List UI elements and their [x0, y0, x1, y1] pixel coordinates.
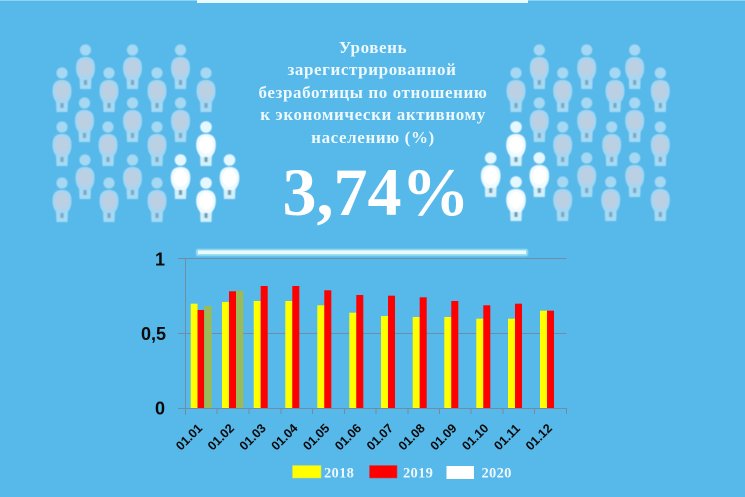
top edge highlight — [0, 0, 745, 1]
series 2018 — [191, 301, 547, 408]
y axis labels: 1 — [155, 250, 165, 270]
y axis labels: 0 — [155, 398, 165, 418]
title: зарегистрированной — [287, 60, 457, 79]
x axis labels: 01.12 — [523, 421, 555, 453]
bar chart — [141, 250, 566, 453]
x axis labels: 01.08 — [396, 421, 428, 453]
x axis labels: 01.09 — [428, 421, 460, 453]
x axis labels: 01.03 — [237, 421, 269, 453]
x axis labels — [173, 421, 555, 453]
x axis labels: 01.04 — [269, 421, 301, 453]
top accent bar — [197, 0, 528, 3]
x axis labels: 01.02 — [205, 421, 237, 453]
x axis labels: 01.11 — [491, 421, 523, 453]
legend — [292, 466, 512, 482]
x axis labels: 01.10 — [459, 421, 491, 453]
y axis labels — [141, 250, 166, 418]
title: населению (%) — [311, 128, 435, 147]
divider bar above chart — [196, 249, 528, 256]
title: к экономически активному — [260, 105, 486, 124]
legend: 2020 — [482, 466, 512, 482]
y axis labels: 0,5 — [141, 324, 166, 344]
series 2019 — [198, 286, 554, 408]
title: безработицы по отношению — [259, 83, 487, 102]
x axis labels: 01.06 — [332, 421, 364, 453]
headline value: 3,74% — [282, 154, 470, 230]
people group: left — [52, 44, 239, 222]
x axis labels: 01.01 — [173, 421, 205, 453]
series 2020 — [204, 291, 243, 408]
title — [259, 38, 487, 147]
title: Уровень — [339, 38, 407, 57]
people group: right — [481, 44, 670, 221]
legend: 2019 — [403, 466, 433, 482]
x axis labels: 01.05 — [300, 421, 332, 453]
x axis labels: 01.07 — [364, 421, 396, 453]
gridlines and axes — [178, 258, 566, 415]
legend: 2018 — [324, 466, 354, 482]
